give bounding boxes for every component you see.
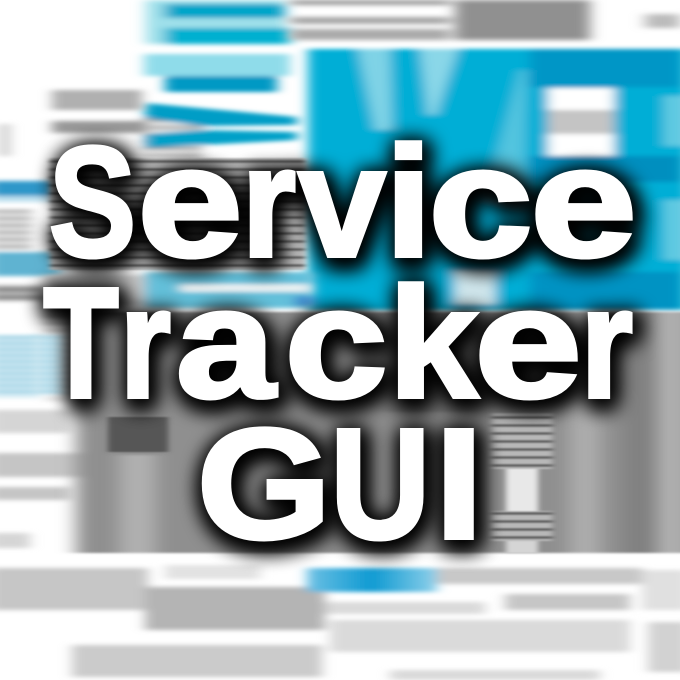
title text: i [385,115,432,290]
title shadow: e [477,261,585,436]
title shadow: k [392,261,481,436]
title shadow [46,120,640,577]
title shadow: c [288,261,391,436]
title text: G [197,397,331,572]
title text: U [330,397,430,572]
title shadow: e [140,120,246,295]
title shadow: c [432,120,536,295]
dark block [108,417,168,452]
title shadow: a [179,261,280,436]
top strip: grey text [290,0,680,40]
blue streaks under first line [35,272,315,400]
sidebar [142,54,297,168]
title text: c [428,115,533,290]
title text [43,115,637,572]
title [43,115,640,577]
title text: e [474,256,582,431]
title text: c [285,256,388,431]
title text: T [43,256,119,431]
web banner [308,49,680,310]
title shadow: T [46,261,122,436]
title shadow: v [301,120,389,295]
title shadow: i [388,120,435,295]
top strip: blue streaks [146,0,290,44]
grey lower panel [76,312,680,553]
title text: r [581,256,633,431]
title shadow: G [200,402,334,577]
title shadow: r [584,261,636,436]
left column of text blur [0,90,147,548]
title shadow: e [533,120,640,295]
title text: r [120,256,171,431]
title shadow: r [123,261,174,436]
title text: I [435,397,483,572]
title shadow: I [438,402,486,577]
title text: r [242,115,296,290]
grey stripes behind first line [50,158,305,270]
title text: e [137,115,243,290]
title text: S [49,115,136,290]
striped column [492,413,552,553]
title text: k [389,256,478,431]
title shadow: U [333,402,433,577]
bottom text blur [0,565,680,680]
title shadow: S [52,120,139,295]
title shadow: r [245,120,299,295]
title text: a [176,256,277,431]
title text: e [530,115,637,290]
title text: v [298,115,386,290]
